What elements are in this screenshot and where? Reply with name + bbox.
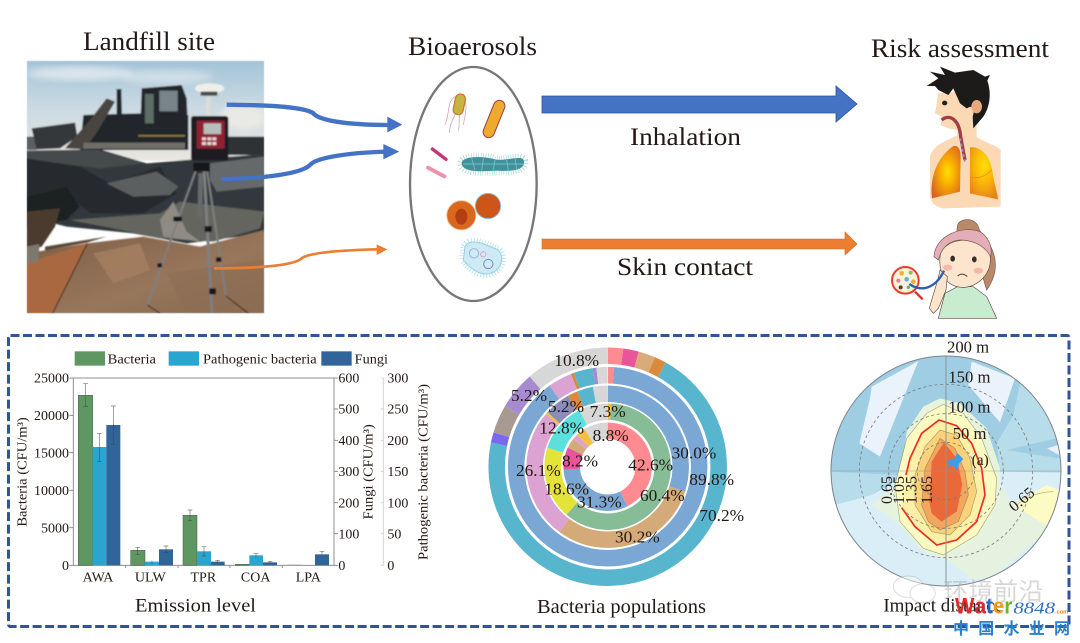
- label: Skin contact: Skin contact: [617, 254, 753, 281]
- percentage labels: 8.2%: [562, 452, 598, 471]
- icon: cyan amoeba cell: [463, 242, 502, 274]
- chart: emission level bar chart: [14, 351, 430, 617]
- watermark: Water8848.com: 8848: [1013, 598, 1055, 617]
- arrow: skin contact: [542, 232, 857, 255]
- ring 1 outer: [497, 356, 719, 578]
- error bars: [83, 384, 324, 564]
- headband: [934, 230, 991, 260]
- rings: [497, 356, 719, 578]
- watermark: Chinese water network: 中 国 水 业 网: [953, 615, 1070, 639]
- icon: teal bacillus: [462, 157, 524, 171]
- category labels: ULW: [135, 570, 167, 585]
- watermark: Water8848.com: Water: [955, 594, 1013, 619]
- contour value labels: 0.65: [879, 476, 896, 504]
- category labels: AWA: [83, 570, 113, 585]
- pathogenic axis tick labels: 100: [387, 496, 408, 511]
- watermark: Water8848.com: [955, 594, 1068, 619]
- fungi axis tick labels: 600: [338, 372, 359, 387]
- pathogenic axis tick labels: 150: [387, 465, 408, 480]
- percentage labels: 60.4%: [640, 486, 685, 505]
- right lung: [970, 147, 998, 199]
- percentage labels: 8.8%: [593, 426, 629, 445]
- category labels: TPR: [191, 570, 217, 585]
- hair: [927, 67, 990, 128]
- fungi bars: [106, 425, 329, 565]
- contour value labels: 1.05: [891, 476, 908, 504]
- percentage labels: 89.8%: [689, 470, 734, 489]
- arrow: orange curve to bioaerosols: [214, 244, 387, 268]
- fungi axis tick labels: 300: [338, 465, 359, 480]
- pathogenic axis tick labels: 0: [387, 559, 394, 574]
- contour bands: [830, 361, 1063, 588]
- distance labels: 50 m: [953, 424, 986, 443]
- magnifier and blue arrow: [915, 292, 923, 299]
- fungi axis tick labels: 100: [338, 527, 359, 542]
- bacteria bars: [78, 395, 301, 565]
- watermark: Water8848.com: .com: [1055, 610, 1068, 616]
- distance labels: 150 m: [948, 368, 990, 387]
- pathogenic axis tick labels: [387, 372, 408, 574]
- photo: landfill site with sampler on tripod: [27, 61, 267, 313]
- fungi axis tick labels: 500: [338, 403, 359, 418]
- arrow: inhalation: [542, 86, 857, 122]
- ground: [27, 230, 264, 313]
- pathogenic bacteria bars: [93, 447, 263, 565]
- icon: orange cocci: [447, 193, 501, 230]
- pathogenic axis tick labels: 300: [387, 372, 408, 387]
- percentage labels: 12.8%: [539, 419, 584, 438]
- watermark text: 环境前沿: [943, 572, 1043, 608]
- percentage labels: 30.2%: [615, 528, 660, 547]
- hand: [929, 270, 947, 313]
- legend: Pathogenic bacteria: [203, 351, 317, 366]
- airway: [942, 117, 965, 160]
- contour value labels: 1.65: [919, 476, 936, 504]
- icon: girl with skin contact: [892, 220, 997, 318]
- icon: pink rods: [428, 149, 446, 176]
- percentage labels: 7.3%: [590, 402, 626, 421]
- percentage labels: 5.2%: [511, 386, 547, 405]
- left axis tick labels: [34, 372, 69, 574]
- left lung: [931, 146, 961, 198]
- left axis tick labels: 10000: [34, 484, 69, 499]
- left axis tick labels: 20000: [34, 409, 69, 424]
- ring 5 inner: [572, 431, 644, 503]
- pathogenic axis tick labels: 50: [387, 527, 401, 542]
- percentage labels: 10.8%: [554, 351, 599, 370]
- axis title: pathogenic bacteria: Pathogenic bacteria (CFU/m³): [415, 384, 430, 560]
- pathogenic axis tick labels: 250: [387, 403, 408, 418]
- legend: Bacteria: [108, 351, 156, 366]
- distance labels: [947, 337, 990, 469]
- contour value labels: 1.35: [904, 476, 921, 504]
- WeChat bubbles: [893, 576, 935, 603]
- caption: Impact distance: Impact distance: [883, 596, 1003, 617]
- left axis tick labels: 25000: [34, 372, 69, 387]
- oval outline: [410, 67, 537, 301]
- percentage labels: 31.3%: [577, 493, 622, 512]
- contour lines: [895, 404, 1053, 555]
- polar grid: [831, 356, 1061, 586]
- fungi axis tick labels: 400: [338, 434, 359, 449]
- category labels: COA: [241, 570, 270, 585]
- left axis tick labels: 0: [62, 559, 69, 574]
- chart: bacteria populations concentric donuts: [497, 351, 744, 618]
- ring 2: [516, 375, 699, 558]
- legend: [75, 351, 388, 366]
- torso: [930, 120, 1001, 208]
- polar border: [831, 356, 1061, 586]
- axis title: bacteria: Bacteria (CFU/m³): [14, 417, 29, 527]
- caption: Bacteria populations: Bacteria populations: [537, 596, 706, 618]
- distance labels: 100 m: [948, 397, 990, 416]
- distance labels: 200 m: [947, 337, 989, 356]
- bulldozer: [80, 85, 188, 150]
- body: [938, 287, 997, 318]
- hair bun and back hair: [957, 220, 995, 290]
- face: [935, 90, 978, 132]
- icon: flagellated bacterium: [445, 93, 466, 133]
- chart: impact distance polar contour map: [830, 337, 1063, 617]
- fungi axis tick labels: 0: [338, 559, 345, 574]
- pathogenic axis tick labels: 200: [387, 434, 408, 449]
- left axis tick labels: 15000: [34, 446, 69, 461]
- red threshold contour: [902, 420, 985, 545]
- percentage labels: 42.6%: [628, 455, 673, 474]
- category labels: LPA: [296, 570, 321, 585]
- ring 4: [553, 412, 663, 522]
- category labels: [83, 570, 321, 585]
- heading: Landfill site: Landfill site: [83, 27, 215, 56]
- heading: Bioaerosols: Bioaerosols: [408, 32, 537, 61]
- panel: bioaerosols oval with microbes: [410, 67, 537, 301]
- face: [940, 240, 990, 287]
- watermark: environment frontier WeChat logo: [893, 572, 1043, 608]
- percentage labels: 30.0%: [672, 443, 716, 462]
- ring 3: [535, 394, 681, 540]
- icon: rod bacterium: [481, 99, 507, 139]
- percentage labels: [511, 351, 744, 547]
- heading: Risk assessment: Risk assessment: [871, 34, 1050, 63]
- sampler stand: [147, 168, 226, 313]
- caption: Emission level: Emission level: [135, 596, 256, 617]
- sampler box and GPS: [206, 97, 211, 117]
- arrow: lower blue curve to bioaerosols: [221, 144, 399, 179]
- icon: blue star marker: [947, 453, 963, 470]
- percentage labels: 18.6%: [544, 479, 589, 498]
- axis title: fungi: Fungi (CFU/m³): [360, 424, 375, 519]
- distance labels: (a): [972, 452, 989, 469]
- axes: [69, 378, 383, 568]
- contour value labels: 0.65: [1006, 484, 1038, 515]
- left axis tick labels: 5000: [41, 521, 69, 536]
- tarps: [27, 149, 264, 243]
- fungi axis tick labels: 200: [338, 496, 359, 511]
- arrow: upper blue curve to bioaerosols: [227, 105, 402, 132]
- contour value labels: [879, 476, 1038, 515]
- legend: Fungi: [355, 351, 388, 366]
- percentage labels: 5.2%: [548, 397, 584, 416]
- icon: person with lungs: [927, 67, 1001, 208]
- panel: dashed frame: [8, 336, 1069, 626]
- fungi axis tick labels: [338, 372, 359, 574]
- percentage labels: 70.2%: [699, 506, 744, 525]
- label: Inhalation: Inhalation: [630, 124, 742, 151]
- percentage labels: 26.1%: [516, 461, 561, 480]
